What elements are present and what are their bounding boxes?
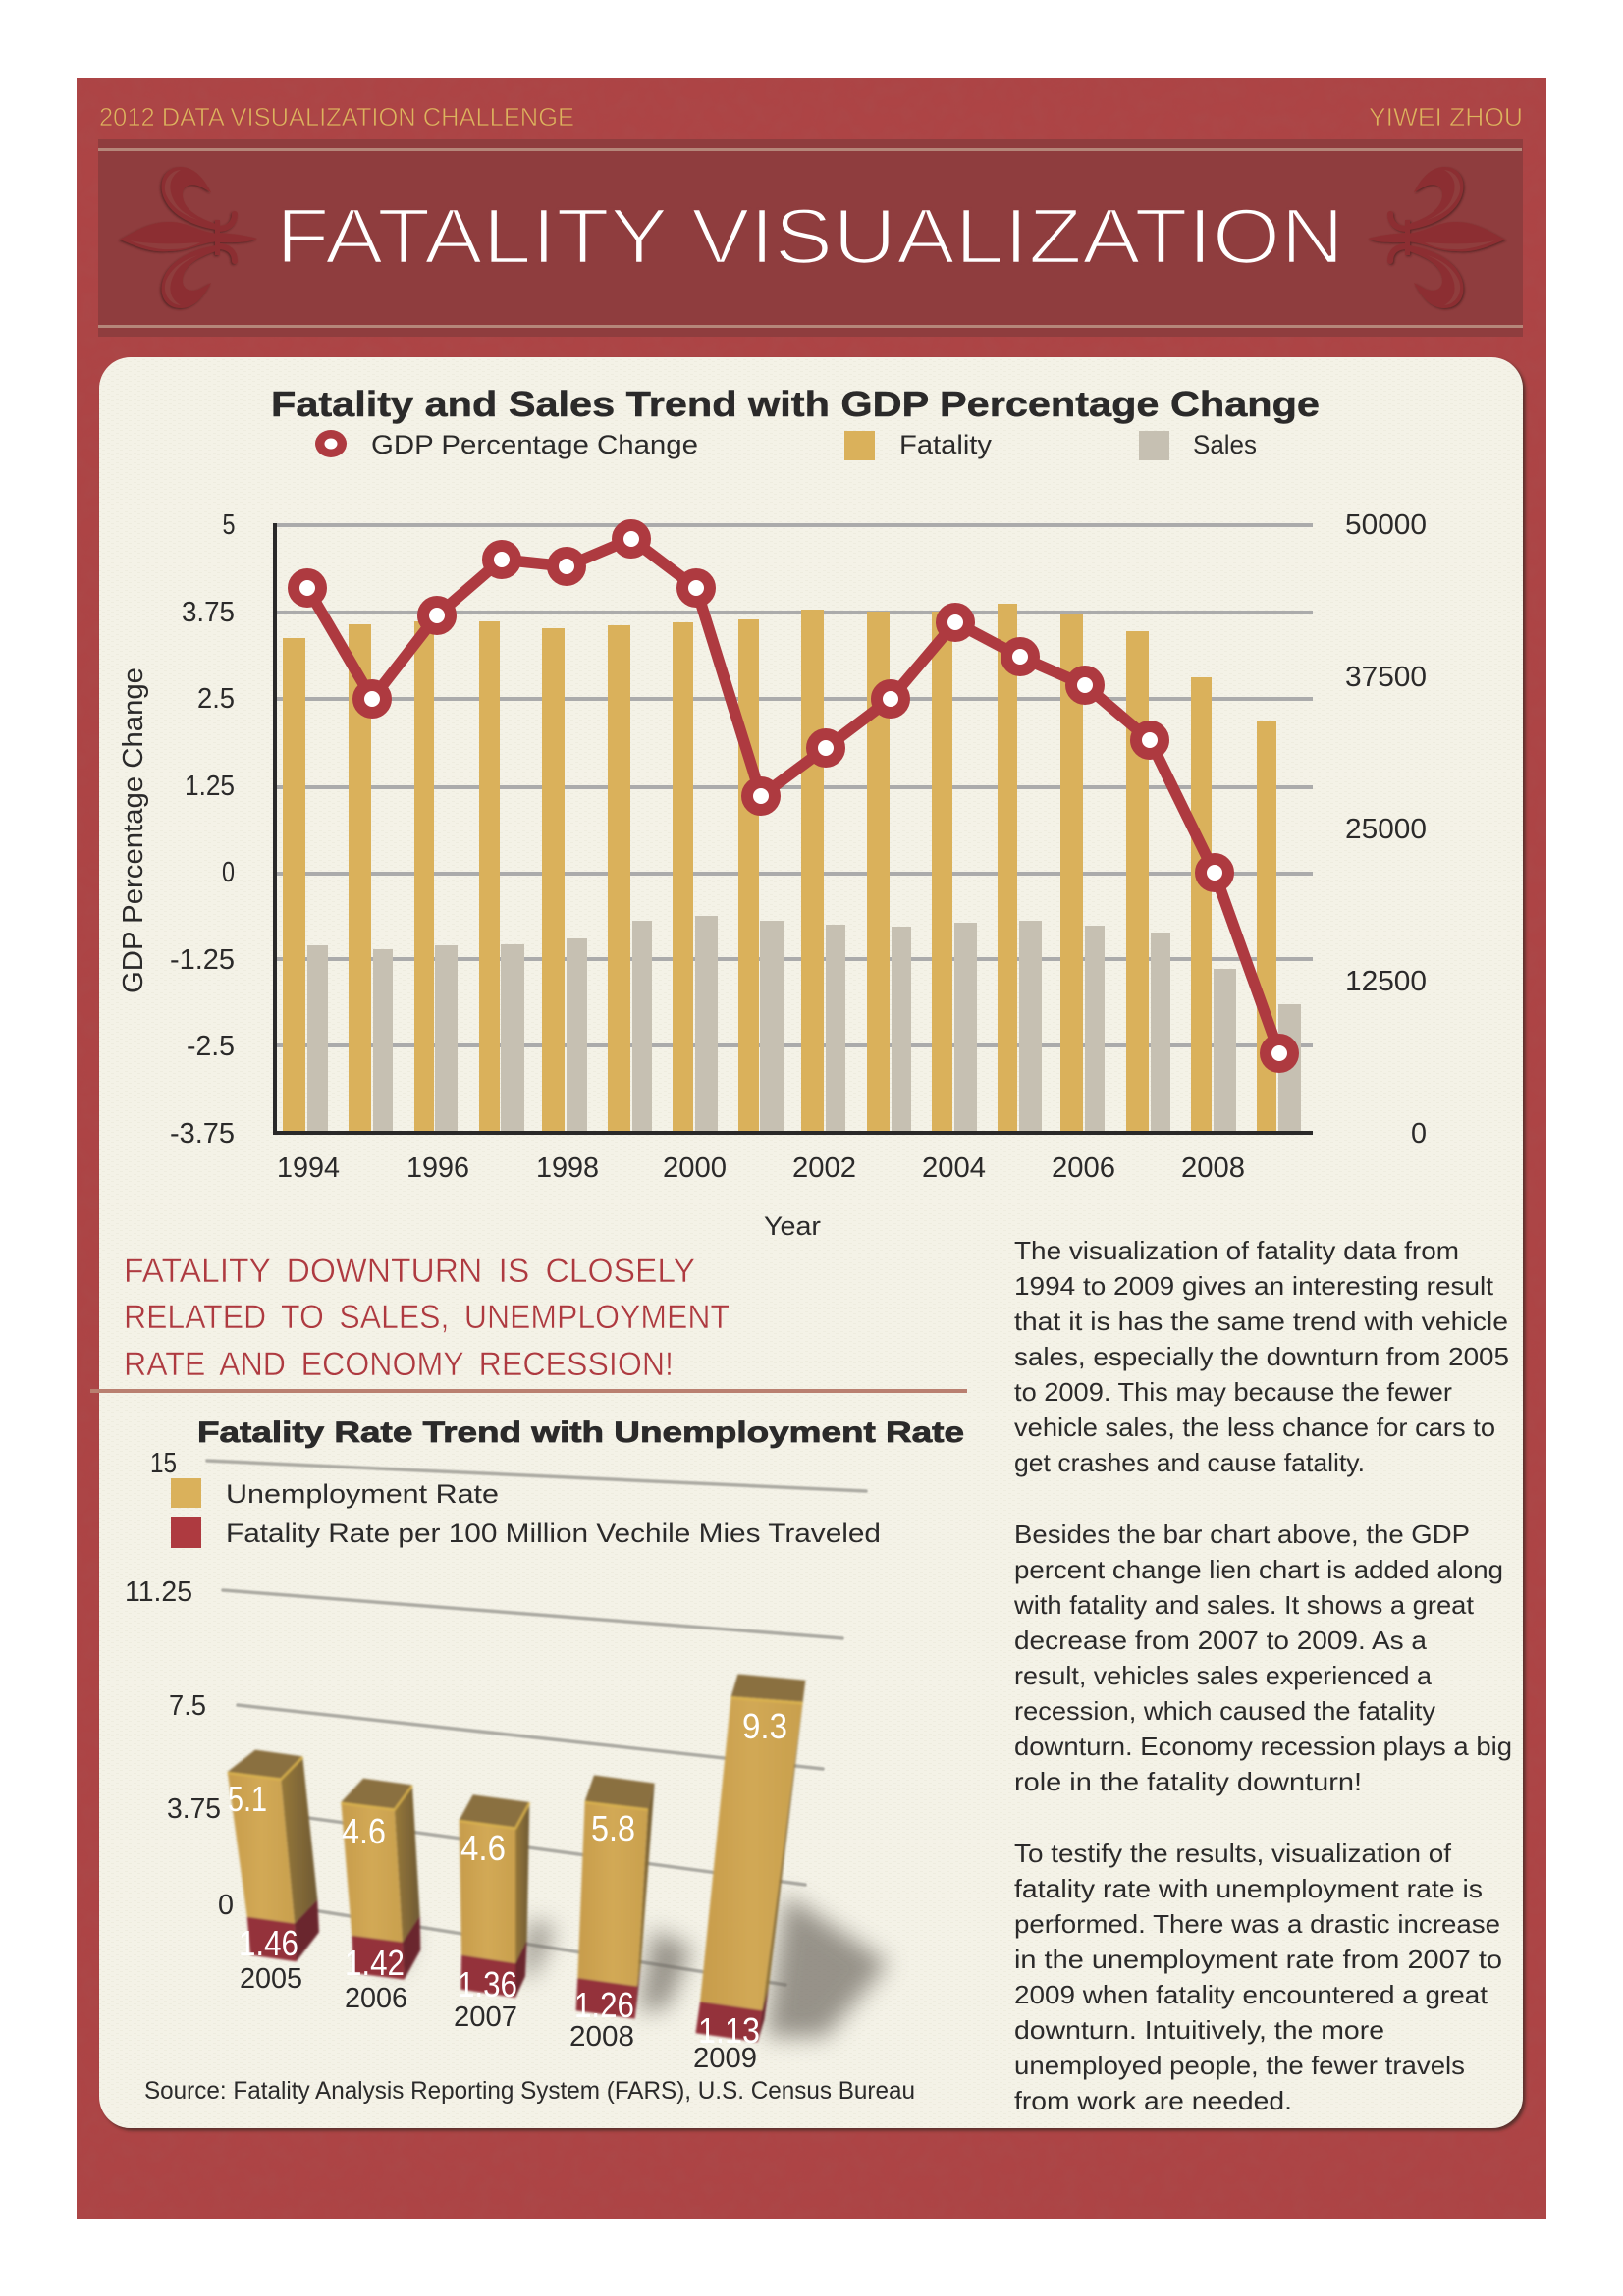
y axis labels: 11.25 bbox=[125, 1576, 192, 1608]
paragraph 3: downturn. Intuitively, the more bbox=[1014, 2015, 1384, 2045]
y axis labels: 15 bbox=[150, 1448, 177, 1479]
fatality rate value labels bbox=[239, 1923, 760, 2051]
paragraph 3: from work are needed. bbox=[1014, 2086, 1292, 2115]
paragraph 2: downturn. Economy recession plays a big bbox=[1014, 1732, 1512, 1761]
year labels bbox=[240, 1963, 757, 2074]
sales bars bbox=[307, 916, 1301, 1132]
unemployment value labels: 4.6 bbox=[460, 1828, 506, 1868]
paragraph 1 bbox=[1014, 1236, 1509, 1477]
x axis labels bbox=[277, 1152, 1245, 1184]
right axis labels: 25000 bbox=[1345, 814, 1427, 845]
paragraph 2: recession, which caused the fatality bbox=[1014, 1696, 1435, 1726]
legend: lower chart bbox=[171, 1478, 881, 1548]
cream content panel bbox=[99, 357, 1523, 2128]
paragraph 2: with fatality and sales. It shows a great bbox=[1013, 1590, 1475, 1620]
left axis labels: -2.5 bbox=[187, 1031, 235, 1062]
legend item: Sales: Sales bbox=[1193, 430, 1257, 459]
paragraph 1: vehicle sales, the less chance for cars to bbox=[1014, 1413, 1495, 1442]
left axis labels: -1.25 bbox=[170, 944, 235, 976]
paragraph 3: 2009 when fatality encountered a great bbox=[1014, 1980, 1488, 2009]
callout: key finding: RELATED TO SALES, UNEMPLOYMENT bbox=[124, 1299, 730, 1336]
left axis labels bbox=[170, 509, 236, 1149]
paragraph 1: that it is has the same trend with vehicle bbox=[1014, 1307, 1508, 1336]
left axis labels: -3.75 bbox=[170, 1118, 235, 1149]
unemployment value labels bbox=[228, 1706, 787, 1868]
unemployment value labels: 9.3 bbox=[742, 1706, 787, 1746]
legend item: GDP Percentage Change: GDP Percentage Change bbox=[371, 430, 698, 459]
year labels: 2006 bbox=[345, 1983, 407, 2014]
year labels: 2008 bbox=[569, 2021, 634, 2053]
bar 2005 bbox=[228, 1750, 319, 1961]
left axis labels: 0 bbox=[222, 857, 235, 888]
combo chart: fatality and sales bars with GDP line bbox=[118, 509, 1427, 1241]
year labels: 2009 bbox=[693, 2043, 757, 2074]
right axis labels: 0 bbox=[1411, 1118, 1427, 1149]
paragraph 3: To testify the results, visualization of bbox=[1014, 1839, 1452, 1868]
fatality rate value labels: 1.36 bbox=[458, 1964, 517, 2004]
x axis labels: 1996 bbox=[406, 1152, 469, 1184]
fatality bars bbox=[283, 604, 1276, 1132]
GDP line bbox=[294, 525, 1293, 1067]
callout: key finding: FATALITY DOWNTURN IS CLOSELY bbox=[124, 1253, 695, 1290]
icon: left fleur-de-lis bbox=[120, 167, 257, 308]
title banner bbox=[98, 139, 1523, 337]
y axis labels bbox=[125, 1448, 234, 1921]
x axis labels: 2006 bbox=[1052, 1152, 1115, 1184]
left axis labels: 2.5 bbox=[197, 683, 235, 715]
y axis labels: 3.75 bbox=[167, 1793, 221, 1825]
legend item: Fatality bbox=[844, 430, 993, 460]
paragraph 2: Besides the bar chart above, the GDP bbox=[1014, 1520, 1470, 1549]
right axis labels: 37500 bbox=[1345, 662, 1427, 693]
year labels: 2005 bbox=[240, 1963, 302, 1995]
unemployment value labels: 5.1 bbox=[228, 1779, 267, 1819]
paragraph 3 bbox=[1014, 1839, 1502, 2115]
left axis labels: 1.25 bbox=[185, 771, 235, 802]
y axis labels: 0 bbox=[218, 1890, 234, 1921]
x axis labels: 2008 bbox=[1181, 1152, 1245, 1184]
x axis labels: 1998 bbox=[536, 1152, 599, 1184]
paragraph 3: performed. There was a drastic increase bbox=[1014, 1909, 1500, 1939]
y axis title: GDP Percentage Change bbox=[118, 667, 149, 993]
heading: top chart title: Fatality and Sales Trend with GDP Percentage Change bbox=[271, 384, 1320, 424]
header text: challenge name: 2012 DATA VISUALIZATION CHALLENGE bbox=[99, 102, 574, 132]
unemployment value labels: 5.8 bbox=[591, 1808, 635, 1848]
legend item: Sales bbox=[1139, 430, 1257, 460]
bar 2009 bbox=[695, 1674, 805, 2042]
right axis labels: 12500 bbox=[1345, 966, 1427, 997]
y axis labels: 7.5 bbox=[169, 1690, 206, 1722]
fatality rate value labels: 1.26 bbox=[574, 1985, 634, 2025]
legend: lower chart: Unemployment Rate bbox=[226, 1479, 499, 1509]
legend item: Fatality: Fatality bbox=[899, 430, 993, 459]
year labels: 2007 bbox=[454, 2002, 517, 2033]
x axis title: Year bbox=[764, 1211, 821, 1241]
paragraph 2: percent change lien chart is added along bbox=[1014, 1555, 1503, 1584]
left axis labels: 5 bbox=[222, 509, 236, 541]
3D bars bbox=[228, 1674, 805, 2042]
3D bar chart: unemployment and fatality rate bbox=[125, 1448, 889, 2074]
callout: key finding: RATE AND ECONOMY RECESSION! bbox=[124, 1346, 674, 1383]
paragraph 3: unemployed people, the fewer travels bbox=[1014, 2051, 1465, 2080]
paragraph 1: to 2009. This may because the fewer bbox=[1014, 1377, 1452, 1407]
source note: Source: Fatality Analysis Reporting System (FARS), U.S. Census Bureau bbox=[144, 2077, 915, 2105]
paragraph 1: 1994 to 2009 gives an interesting result bbox=[1014, 1271, 1494, 1301]
paragraph 2: result, vehicles sales experienced a bbox=[1014, 1661, 1433, 1690]
x axis labels: 2004 bbox=[922, 1152, 986, 1184]
left axis labels: 3.75 bbox=[182, 597, 235, 628]
bar shadows bbox=[388, 1895, 889, 2037]
x axis labels: 1994 bbox=[277, 1152, 340, 1184]
bar 2007 bbox=[460, 1794, 529, 1998]
paragraph 3: in the unemployment rate from 2007 to bbox=[1014, 1945, 1502, 1974]
paragraph 2: role in the fatality downturn! bbox=[1014, 1767, 1362, 1796]
paragraph 1: get crashes and cause fatality. bbox=[1014, 1448, 1365, 1477]
icon: right fleur-de-lis bbox=[1368, 167, 1505, 308]
fatality rate value labels: 1.13 bbox=[698, 2010, 760, 2051]
perspective grid lines bbox=[207, 1461, 866, 1985]
paragraph 2: decrease from 2007 to 2009. As a bbox=[1014, 1626, 1428, 1655]
fatality rate value labels: 1.42 bbox=[345, 1943, 405, 1983]
right axis labels: 50000 bbox=[1345, 509, 1427, 541]
header text: author: YIWEI ZHOU bbox=[1369, 102, 1523, 132]
unemployment value labels: 4.6 bbox=[342, 1811, 386, 1851]
x axis labels: 2002 bbox=[792, 1152, 856, 1184]
grid lines bbox=[275, 523, 1313, 1047]
bar 2006 bbox=[341, 1779, 420, 1980]
paragraph 2 bbox=[1013, 1520, 1512, 1796]
axes bbox=[273, 523, 1313, 1135]
bar 2008 bbox=[576, 1775, 655, 2019]
paragraph 1: The visualization of fatality data from bbox=[1014, 1236, 1459, 1265]
paragraph 3: fatality rate with unemployment rate is bbox=[1014, 1874, 1483, 1903]
callout: key finding bbox=[124, 1253, 730, 1383]
right axis labels bbox=[1345, 509, 1427, 1149]
paragraph 1: sales, especially the downturn from 2005 bbox=[1014, 1342, 1509, 1371]
x axis labels: 2000 bbox=[663, 1152, 727, 1184]
legend: top chart bbox=[315, 430, 1257, 460]
heading: lower chart title: Fatality Rate Trend with Unemployment Rate bbox=[197, 1416, 964, 1449]
title: FATALITY VISUALIZATION bbox=[276, 192, 1344, 280]
legend: lower chart: Fatality Rate per 100 Million Vechile Mies Traveled bbox=[226, 1519, 881, 1548]
fatality rate value labels: 1.46 bbox=[239, 1923, 298, 1963]
text block: explanation bbox=[1013, 1236, 1512, 2115]
